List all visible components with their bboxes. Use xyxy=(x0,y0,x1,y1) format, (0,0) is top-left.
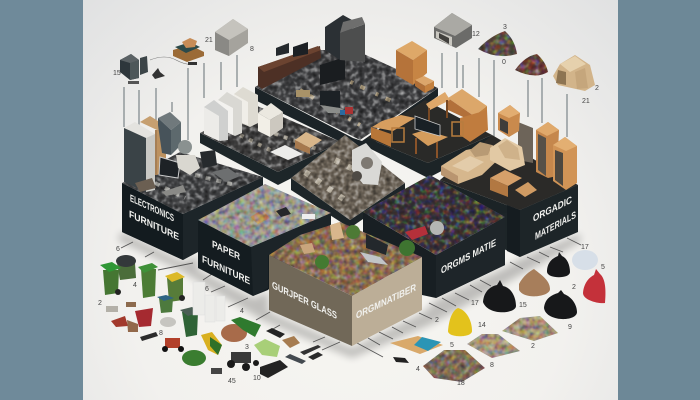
icon: small part xyxy=(211,368,222,374)
icon: cardboard heap xyxy=(553,55,595,91)
icon: book stack xyxy=(150,38,204,65)
label: paper: PAPER xyxy=(212,238,240,263)
icon: green bag xyxy=(254,339,280,357)
box shadows xyxy=(118,232,580,358)
number labels: 8 xyxy=(159,330,163,337)
icon: bookshelves xyxy=(498,105,520,137)
number labels: 5 xyxy=(450,342,454,349)
panel: appliance box xyxy=(200,87,341,185)
right side panel xyxy=(618,0,700,400)
icon: magazines xyxy=(390,336,443,354)
panel: organic materials box xyxy=(500,185,578,257)
number labels: 2 xyxy=(531,343,535,350)
icon: yellow green lump xyxy=(201,332,222,355)
icon: brown bag xyxy=(519,269,550,296)
number labels: 45 xyxy=(228,378,236,385)
icon: chairs xyxy=(392,128,404,142)
icon: yellow bag xyxy=(448,308,472,336)
number labels: 9 xyxy=(568,324,572,331)
number labels: 15 xyxy=(519,302,527,309)
icon: black bag xyxy=(483,280,516,312)
icon: debris heap one xyxy=(478,31,517,56)
icon: laptop xyxy=(366,234,388,255)
icon: dark strip xyxy=(300,345,321,355)
icon: battery block xyxy=(260,360,288,378)
label: electronics: ELECTRONICS xyxy=(130,192,174,225)
icon: grey unit xyxy=(158,112,181,130)
icon: green bin xyxy=(138,263,158,298)
icon: small blue lid bin xyxy=(157,295,174,313)
panel: electronics box xyxy=(122,112,263,260)
group: bags and scattered piles xyxy=(390,250,605,382)
icon: carton xyxy=(295,132,322,148)
icon: dark green bin xyxy=(180,307,200,337)
label: 21: 21 xyxy=(205,37,213,44)
number labels: 2 xyxy=(572,284,576,291)
icon: white fridges xyxy=(234,87,258,127)
icon: sofa xyxy=(441,145,505,184)
icon: black bag xyxy=(544,290,577,319)
icon: dark chair xyxy=(518,122,533,163)
icon: fridge xyxy=(124,122,155,138)
background xyxy=(83,0,618,400)
icon: black strip xyxy=(140,332,158,341)
number labels: 5 xyxy=(601,264,605,271)
label: furniture: FURNITURE xyxy=(129,208,179,243)
icon: black device xyxy=(266,328,285,338)
icon: black phone xyxy=(393,357,409,363)
icon: small desk xyxy=(372,115,415,131)
icon: red bag xyxy=(583,269,605,303)
number labels: 17 xyxy=(471,300,479,307)
icon: black bag xyxy=(547,252,570,277)
icon: dark lid bin xyxy=(116,255,136,280)
number labels: 10 xyxy=(253,375,261,382)
icon: black phone xyxy=(308,352,323,360)
icon: scattered pile xyxy=(467,334,520,358)
number labels: 6 xyxy=(116,246,120,253)
icon: brown box xyxy=(282,336,300,348)
panel: organic mix box xyxy=(363,175,505,298)
icon: washer xyxy=(352,143,382,185)
icon: microwave xyxy=(434,13,472,48)
number labels: 3 xyxy=(245,344,249,351)
detail bits xyxy=(345,107,353,114)
number labels: 17 xyxy=(581,244,589,251)
label: 0: 0 xyxy=(502,59,506,66)
label: gurjper glass: GURJPER GLASS xyxy=(272,279,337,322)
floor tick marks xyxy=(121,238,581,357)
icon: scattered pile xyxy=(423,350,485,382)
leader lines xyxy=(124,52,567,140)
label: furniture: FURNITURE xyxy=(202,253,250,287)
icon: basket xyxy=(221,324,247,342)
label: materials: MATERIALS xyxy=(535,209,576,243)
icon: clear glasses xyxy=(193,282,225,322)
icon: monitor xyxy=(415,116,440,136)
panel: furniture box xyxy=(367,41,492,178)
icon: side table xyxy=(490,170,522,186)
icon: scattered pile xyxy=(502,316,558,341)
label: 21: 21 xyxy=(582,98,590,105)
left side panel xyxy=(0,0,83,400)
icon: laptop xyxy=(159,157,180,178)
label: orgmnatiber: ORGMNATIBER xyxy=(356,282,416,322)
number labels: 4 xyxy=(240,308,244,315)
label: 2: 2 xyxy=(595,85,599,92)
panel: paper box xyxy=(198,184,331,296)
label: 15: 15 xyxy=(113,70,121,77)
number labels: 2 xyxy=(435,317,439,324)
icon: green tangle xyxy=(231,317,261,337)
number labels: 4 xyxy=(133,282,137,289)
icon: dresser xyxy=(448,89,487,116)
icon: grey scrap xyxy=(160,317,176,327)
number labels: 18 xyxy=(457,380,465,387)
icon: servers xyxy=(325,15,352,60)
panel: top electronics box xyxy=(255,15,438,152)
number labels: 4 xyxy=(416,366,420,373)
icon: debris heap two xyxy=(515,54,548,76)
icon: device blocks xyxy=(200,150,217,168)
label: 8: 8 xyxy=(250,46,254,53)
group: bins and small items xyxy=(100,255,323,378)
icon: grey server box xyxy=(215,19,248,56)
icon: foliage xyxy=(399,240,415,256)
number labels: 8 xyxy=(490,362,494,369)
icon: red toy xyxy=(162,338,184,352)
number labels xyxy=(98,244,605,387)
icon: grey phone xyxy=(285,354,306,364)
label: orgms matie: ORGMS MATIE xyxy=(441,237,496,277)
icon: computer towers xyxy=(120,54,165,84)
icon: brown scrap xyxy=(126,302,136,307)
number labels: 14 xyxy=(478,322,486,329)
icon: cabinet xyxy=(396,41,427,60)
icon: cube xyxy=(258,103,283,120)
icon: green bin xyxy=(100,262,121,295)
number labels: 2 xyxy=(98,300,102,307)
icon: figure device xyxy=(178,140,192,154)
icon: green lump xyxy=(182,350,206,366)
icon: red bin xyxy=(135,308,153,327)
icon: desk xyxy=(258,46,321,89)
icon: grey scrap xyxy=(106,306,118,312)
icon: yellow lid bin xyxy=(165,272,185,302)
icon: cardboard cabinet xyxy=(140,116,166,130)
pile texture xyxy=(255,50,438,140)
panel: sofa box xyxy=(440,105,578,232)
panel: brown cardboard box xyxy=(269,222,422,346)
icon: red scraps xyxy=(111,316,138,332)
icon: card pieces xyxy=(330,222,344,240)
number labels: 6 xyxy=(205,286,209,293)
label: 3: 3 xyxy=(503,24,507,31)
icon: robot xyxy=(227,352,259,371)
icon: clear bag xyxy=(572,250,598,270)
label: 12: 12 xyxy=(472,31,480,38)
panel: mixed appliance box xyxy=(291,135,405,228)
icon: monitors xyxy=(293,42,308,57)
label: organic: ORGADIC xyxy=(533,194,572,225)
